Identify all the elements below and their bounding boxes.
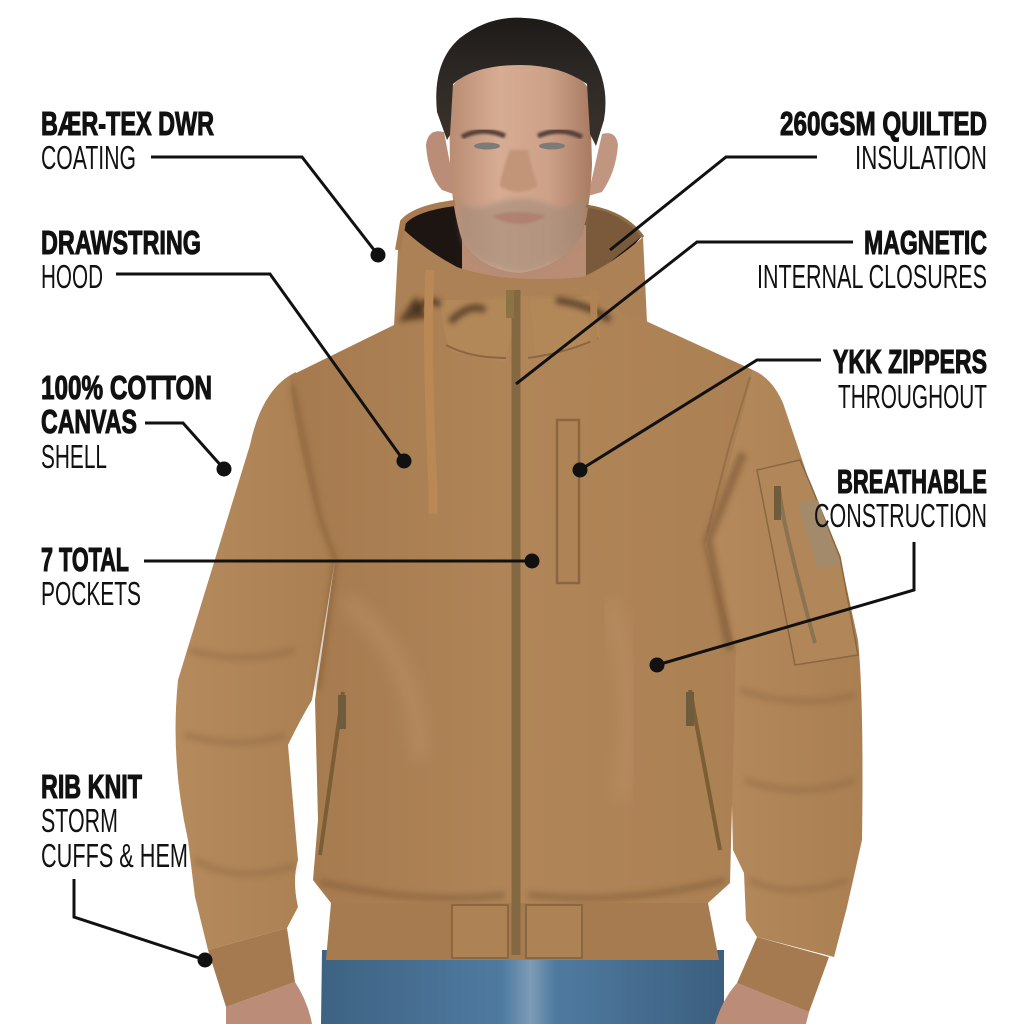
hood interior bbox=[402, 203, 642, 285]
callout: rib knit: CUFFS & HEM bbox=[41, 837, 188, 874]
figure: man wearing jacket bbox=[176, 18, 863, 1024]
callout: cotton canvas: 100% COTTON bbox=[41, 369, 212, 406]
callout: cotton canvas bbox=[41, 369, 232, 476]
callout: drawstring hood bbox=[41, 224, 412, 468]
hood bbox=[394, 203, 647, 362]
callout: total pockets bbox=[41, 541, 540, 612]
left sleeve bbox=[176, 372, 335, 950]
callout: total pockets: 7 TOTAL bbox=[41, 541, 129, 578]
hem ribbing bbox=[326, 903, 719, 960]
callout: cotton canvas: CANVAS bbox=[41, 403, 137, 440]
zipper pull bbox=[506, 290, 514, 318]
pocket zipper pulls bbox=[338, 486, 781, 729]
chest pocket bbox=[557, 420, 579, 583]
callout: drawstring hood: HOOD bbox=[41, 258, 103, 295]
jeans bbox=[321, 950, 724, 1024]
callout: rib knit bbox=[41, 768, 212, 968]
callout: magnetic closures bbox=[516, 224, 987, 384]
callout: breathable construction bbox=[650, 463, 987, 672]
sleeve pocket bbox=[757, 460, 858, 665]
callout: quilted insulation bbox=[610, 105, 987, 250]
jacket body bbox=[290, 290, 753, 903]
center zipper bbox=[512, 290, 520, 955]
right drawstring bbox=[594, 290, 604, 555]
callout: cotton canvas: SHELL bbox=[41, 438, 107, 475]
left cuff bbox=[208, 928, 295, 1007]
callout: total pockets: POCKETS bbox=[41, 575, 141, 612]
callout: rib knit: STORM bbox=[41, 802, 118, 839]
callout: rib knit: RIB KNIT bbox=[41, 768, 142, 805]
head bbox=[426, 18, 618, 282]
callout: DWR coating bbox=[41, 105, 386, 262]
right cuff bbox=[737, 937, 829, 1012]
right side pocket bbox=[690, 690, 720, 850]
callout: DWR coating: COATING bbox=[41, 139, 136, 176]
callout: YKK zippers bbox=[572, 343, 987, 478]
shading bbox=[185, 377, 855, 898]
callout: drawstring hood: DRAWSTRING bbox=[41, 224, 201, 261]
hand: left bbox=[226, 982, 312, 1024]
left side pocket bbox=[320, 692, 343, 855]
left drawstring bbox=[429, 270, 433, 514]
callout: DWR coating: BÆR-TEX DWR bbox=[41, 105, 214, 142]
hand: right bbox=[715, 983, 809, 1024]
right sleeve bbox=[705, 370, 862, 957]
